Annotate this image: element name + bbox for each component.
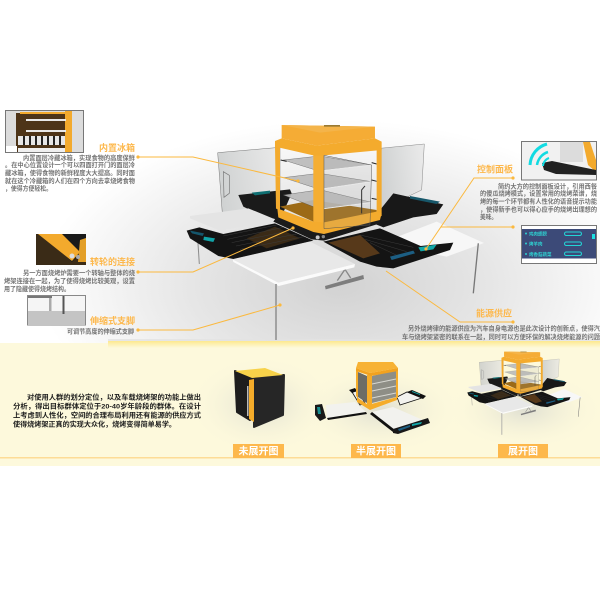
connector: control panel (424, 176, 515, 251)
text: control panel: 的傻瓜烧烤模式，设置常用的烧烤菜谱，烧 (480, 188, 598, 198)
text: control panel: 美味。 (480, 212, 497, 221)
text: built-in fridge: 藏冰箱，使得食物的新鲜程度大大提高。同时面 (5, 168, 135, 177)
heading: wheel connection: 转轮的连接 (90, 256, 135, 267)
background shading (40, 120, 600, 450)
back strips (352, 391, 365, 405)
label: folded: 未展开图 (238, 444, 278, 458)
text: built-in fridge: 就在这个冷藏箱的人们在四个方向去拿烧烤食物 (5, 176, 136, 185)
thumbnail: telescopic leg (28, 296, 86, 325)
heading: control panel: 控制面板 (477, 164, 513, 174)
text: wheel connection: 另一方面烧烤炉需要一个转轴与整体的烧 (23, 268, 136, 277)
label: folded (233, 444, 284, 458)
heading: telescopic leg: 伸缩式支脚 (90, 315, 135, 326)
text: built-in fridge: ，使得方便轻松。 (5, 184, 52, 192)
front left strip (326, 402, 366, 418)
text: wheel connection: 用了隐藏使得烧烤结构。 (4, 284, 70, 293)
text: energy supply: 另外烧烤律的能源供应为汽车自身电源也是此次设计的创新点，使得汽 (408, 324, 600, 332)
thumbnail: fridge interior (6, 110, 84, 152)
heading: energy supply: 能源供应 (476, 308, 512, 318)
text: control panel: 烤的每一个环节都有人性化的语音提示功能 (480, 196, 598, 206)
main product: grill (187, 125, 484, 340)
text: positioning summary: 分析，得出目标群体定位于20-40岁年龄段的群体。在设计 (13, 402, 201, 410)
text: built-in fridge: 内置面层冷藏冰箱，实现食物的高度保鲜 (23, 153, 136, 162)
label: half open (351, 444, 401, 458)
product: folded (235, 368, 284, 427)
product: half open (315, 362, 430, 434)
thumbnail: control panel menu: 烤香菇蔬菜 (529, 251, 552, 258)
text: energy supply: 车与烧烤架紧密的联系在一起，同时可以方便环保的解决烧烤能源的问题 (402, 332, 600, 341)
text: positioning summary: 上考虑到人性化，空间的合理布局利用还有能源的供应方式 (13, 410, 201, 420)
text: energy supply (402, 324, 600, 341)
label: fully open (498, 444, 548, 458)
heading: built-in fridge: 内置冰箱 (99, 142, 135, 153)
connector: leg (136, 303, 282, 332)
thumbnail: control panel wifi (522, 142, 596, 180)
text: control panel: ，使得新手也可以得心应手的烧烤出理想的 (480, 204, 597, 214)
text: positioning summary: 对使用人群的划分定位，以及车载烧烤架的功能上做出 (27, 392, 201, 402)
connector: wheel (136, 226, 295, 274)
text: control panel (480, 182, 598, 221)
bottom band (0, 341, 600, 466)
text: positioning summary: 使得烧烤架正真的实现大众化，烧烤变得简单易学。 (13, 420, 176, 428)
text: built-in fridge: 。在中心位置设计一个可以四面打开门的面层冷 (5, 160, 136, 169)
connector: fridge (136, 155, 300, 183)
thumbnail: control panel menu (522, 226, 596, 264)
thumbnail: control panel menu: 鸡肉翅膀 (529, 230, 547, 238)
cube (358, 372, 367, 403)
text: built-in fridge (5, 153, 136, 192)
text: positioning summary (13, 392, 201, 428)
product: fully open (467, 352, 582, 435)
label: half open: 半展开图 (356, 444, 396, 458)
thumbnail: wheel connection (36, 234, 86, 265)
front right strip (372, 407, 423, 430)
text: telescopic leg: 可调节高度的伸缩式支脚 (67, 326, 134, 336)
text: control panel: 简约大方的控制面板设计，引用西餐 (498, 182, 598, 190)
label: fully open: 展开图 (508, 446, 538, 458)
text: wheel connection (4, 268, 136, 293)
connector: energy (386, 271, 515, 324)
text: wheel connection: 烤架连接在一起，为了使得烧烤比较美观，设置 (4, 276, 135, 285)
thumbnail: control panel menu: 烤羊肉 (529, 240, 543, 248)
